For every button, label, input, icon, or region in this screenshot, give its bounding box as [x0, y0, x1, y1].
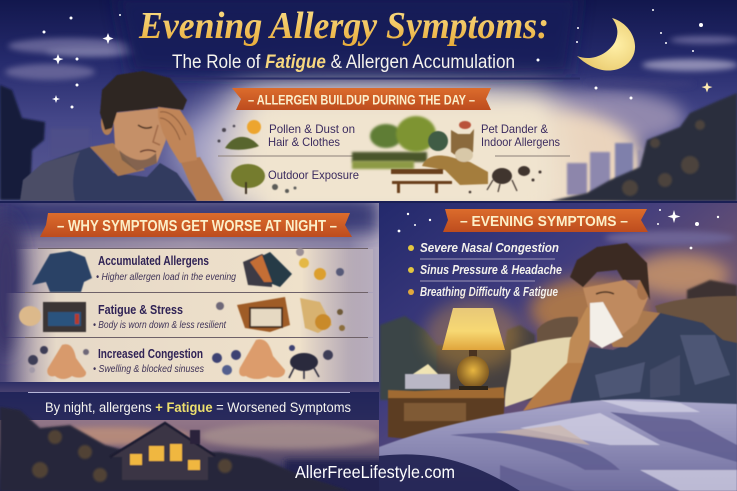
text: pollen and dust: Pollen & Dust on: [269, 122, 355, 136]
background trees: [380, 280, 737, 400]
row: increased congestion: [5, 338, 373, 382]
description: • Higher allergen load in the evening: [96, 271, 236, 283]
row: fatigue and stress: [5, 293, 373, 338]
icon: t-shirt: [32, 251, 92, 292]
title: Evening Allergy Symptoms:: [138, 5, 549, 47]
bench: [391, 169, 452, 193]
icon: right nose, particles and mite: [212, 339, 333, 379]
banner: why symptoms: [40, 213, 352, 237]
icon: clutter and dust: [216, 297, 345, 333]
heading: accumulated allergens: Accumulated Allergens: [98, 253, 209, 268]
moon: [577, 18, 635, 71]
text: pet dander: Pet Dander &: [481, 122, 548, 136]
icon: outdoor tree: [231, 164, 296, 194]
icon: pollen and dust plant: [218, 120, 261, 150]
text: pet dander: Indoor Allergens: [481, 135, 560, 149]
icon: left nose with particles: [28, 344, 89, 379]
nightstand: [388, 387, 505, 440]
heading: increased congestion: Increased Congestion: [98, 346, 203, 361]
blanket: [379, 399, 737, 491]
figure: man holding forehead: [20, 71, 224, 201]
left tree silhouette: [0, 84, 46, 201]
symptom list: Breathing Difficulty & Fatigue: [420, 285, 558, 299]
symptom list: Sinus Pressure & Headache: [420, 262, 562, 277]
panel: evening symptoms: [379, 203, 737, 491]
dust mites: [469, 166, 542, 193]
symptom list: [408, 240, 562, 299]
daylight glow background: [170, 80, 685, 220]
tissue: [590, 302, 623, 348]
row: accumulated allergens: [15, 248, 373, 292]
figure: man blowing nose: [523, 243, 737, 411]
icon: fabrics and pollen: [243, 248, 344, 287]
banner: evening symptoms: [443, 209, 648, 232]
symptom list: Severe Nasal Congestion: [420, 240, 559, 255]
table lamp: [425, 300, 521, 390]
bed headboard: [537, 296, 737, 350]
icon: house with lit windows: [110, 423, 215, 480]
description: • Body is worn down & less resilient: [93, 319, 227, 331]
pillow: [505, 337, 575, 407]
divider: [218, 156, 570, 157]
icon: monitor: [19, 302, 86, 332]
banner: allergen buildup: – ALLERGEN BUILDUP DURING THE DAY –: [248, 92, 475, 108]
heading: fatigue and stress: Fatigue & Stress: [98, 302, 183, 317]
banner: allergen buildup: [232, 88, 491, 110]
stars: [42, 9, 712, 108]
right tree silhouette: [550, 93, 737, 201]
text: pollen and dust: [268, 124, 354, 146]
tissue box: [405, 364, 450, 389]
banner: evening symptoms: – EVENING SYMPTOMS –: [460, 213, 628, 230]
text: pet dander: [482, 124, 560, 148]
stars: [398, 209, 719, 249]
subtitle: The Role of Fatigue & Allergen Accumulation: [172, 52, 515, 73]
park scene with trees, cat and bench: [352, 116, 542, 193]
clouds: [5, 36, 737, 88]
foreground trees: [0, 407, 350, 491]
text: outdoor exposure: Outdoor Exposure: [268, 168, 359, 182]
city skyline: [567, 143, 654, 196]
title band: [114, 34, 577, 89]
banner: why symptoms: – WHY SYMPTOMS GET WORSE AT NIGHT –: [57, 218, 337, 235]
text: pollen and dust: Hair & Clothes: [268, 135, 340, 149]
cat: [422, 121, 488, 185]
summary text: By night, allergens + Fatigue = Worsened Symptoms: [45, 400, 351, 415]
dusk scenery: [0, 382, 385, 491]
website url: AllerFreeLifestyle.com: [295, 462, 455, 482]
summary band: [0, 392, 379, 420]
panel: why symptoms get worse at night: [0, 198, 385, 491]
description: • Swelling & blocked sinuses: [93, 363, 205, 375]
bottom shadow band: [379, 454, 520, 491]
panel: allergen buildup during the day: [0, 0, 737, 220]
